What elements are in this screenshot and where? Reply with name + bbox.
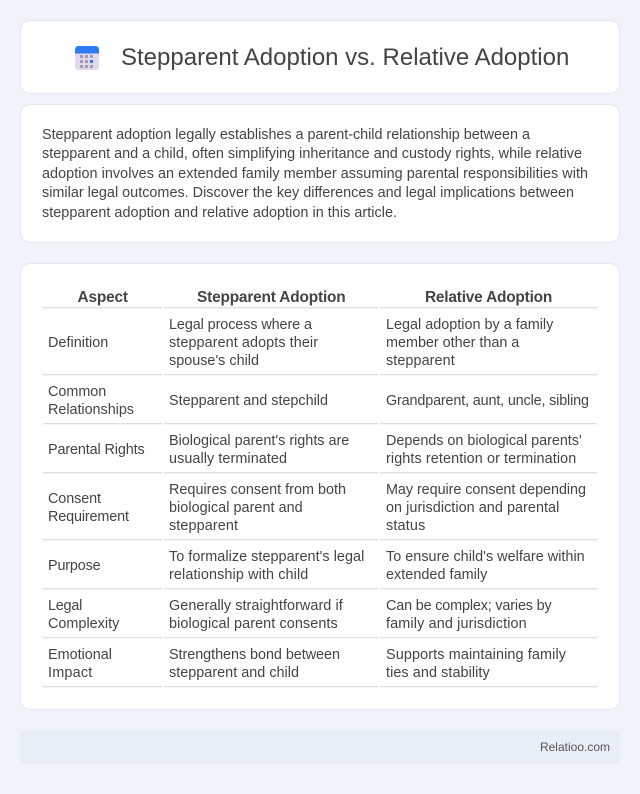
row: legal complexity: [43, 598, 597, 638]
row: consent requirement: status: [386, 518, 425, 534]
intro text: Stepparent adoption legally establishes a parent-child relationship between a: [42, 127, 530, 143]
row: emotional impact: Emotional: [48, 647, 112, 663]
row: definition: [43, 317, 597, 375]
row: legal complexity: Complexity: [48, 616, 120, 632]
table header: Aspect: [78, 289, 128, 306]
row: parental rights: rights retention or termination: [386, 451, 576, 467]
table header: [43, 289, 597, 308]
row: purpose: extended family: [386, 567, 488, 583]
intro text: stepparent and a child, often simplifying inheritance and custody rights, while relative: [42, 146, 582, 162]
row: common relationships: Stepparent and stepchild: [169, 393, 328, 409]
row: legal complexity: Generally straightforward if: [169, 598, 344, 614]
row: parental rights: Parental Rights: [48, 442, 145, 458]
row: consent requirement: stepparent: [169, 518, 238, 534]
row: definition: spouse's child: [169, 353, 259, 369]
footer credit: Relatioo.com: [540, 740, 610, 754]
row: definition: member other than a: [386, 335, 519, 351]
icon: calendar: [75, 46, 99, 70]
table header: Stepparent Adoption: [197, 289, 346, 306]
row: purpose: To formalize stepparent's legal: [169, 549, 364, 565]
row: common relationships: [43, 384, 597, 424]
intro text: similar legal outcomes. Discover the key differences and legal implications between: [42, 185, 574, 201]
row: definition: Definition: [48, 335, 108, 351]
row: parental rights: usually terminated: [169, 451, 287, 467]
row: definition: stepparent adopts their: [169, 335, 318, 351]
row: consent requirement: May require consent depending: [386, 482, 586, 498]
row: emotional impact: ties and stability: [386, 665, 490, 681]
row: emotional impact: stepparent and child: [169, 665, 299, 681]
row: emotional impact: [43, 647, 597, 687]
row: definition: stepparent: [386, 353, 455, 369]
row: consent requirement: biological parent and: [169, 500, 303, 516]
row: purpose: Purpose: [48, 558, 101, 574]
row: consent requirement: Requires consent from both: [169, 482, 346, 498]
row: legal complexity: family and jurisdiction: [386, 616, 527, 632]
row: common relationships: Common: [48, 384, 106, 400]
footer bar: [20, 730, 620, 764]
row: legal complexity: Can be complex; varies by: [386, 598, 552, 614]
row: consent requirement: Consent: [48, 491, 101, 507]
row: legal complexity: biological parent consents: [169, 616, 338, 632]
row: common relationships: Grandparent, aunt, uncle, sibling: [386, 393, 589, 409]
row: legal complexity: Legal: [48, 598, 82, 614]
row: parental rights: [43, 433, 597, 473]
panel: comparison table card: [20, 263, 620, 710]
row: common relationships: Relationships: [48, 402, 134, 418]
row: parental rights: Depends on biological parents': [386, 433, 582, 449]
row: definition: Legal process where a: [169, 317, 312, 333]
row: definition: Legal adoption by a family: [386, 317, 554, 333]
row: parental rights: Biological parent's rights are: [169, 433, 349, 449]
row: consent requirement: Requirement: [48, 509, 129, 525]
intro text: [42, 127, 588, 221]
row: purpose: To ensure child's welfare within: [386, 549, 585, 565]
row: emotional impact: Supports maintaining family: [386, 647, 567, 663]
title: Stepparent Adoption vs. Relative Adoption: [121, 44, 569, 71]
row: consent requirement: on jurisdiction and parental: [386, 500, 559, 516]
row: purpose: [43, 549, 597, 589]
row: purpose: relationship with child: [169, 567, 308, 583]
row: consent requirement: [43, 482, 597, 540]
panel: intro text card: [20, 104, 620, 243]
comparison table: [43, 289, 597, 688]
intro text: adoption involves an extended family member assuming parental responsibilities with: [42, 166, 588, 182]
row: emotional impact: Impact: [48, 665, 92, 681]
table header: Relative Adoption: [425, 289, 552, 306]
intro text: stepparent adoption and relative adoption in this article.: [42, 205, 397, 221]
row: emotional impact: Strengthens bond between: [169, 647, 340, 663]
panel: title card: [20, 20, 620, 94]
